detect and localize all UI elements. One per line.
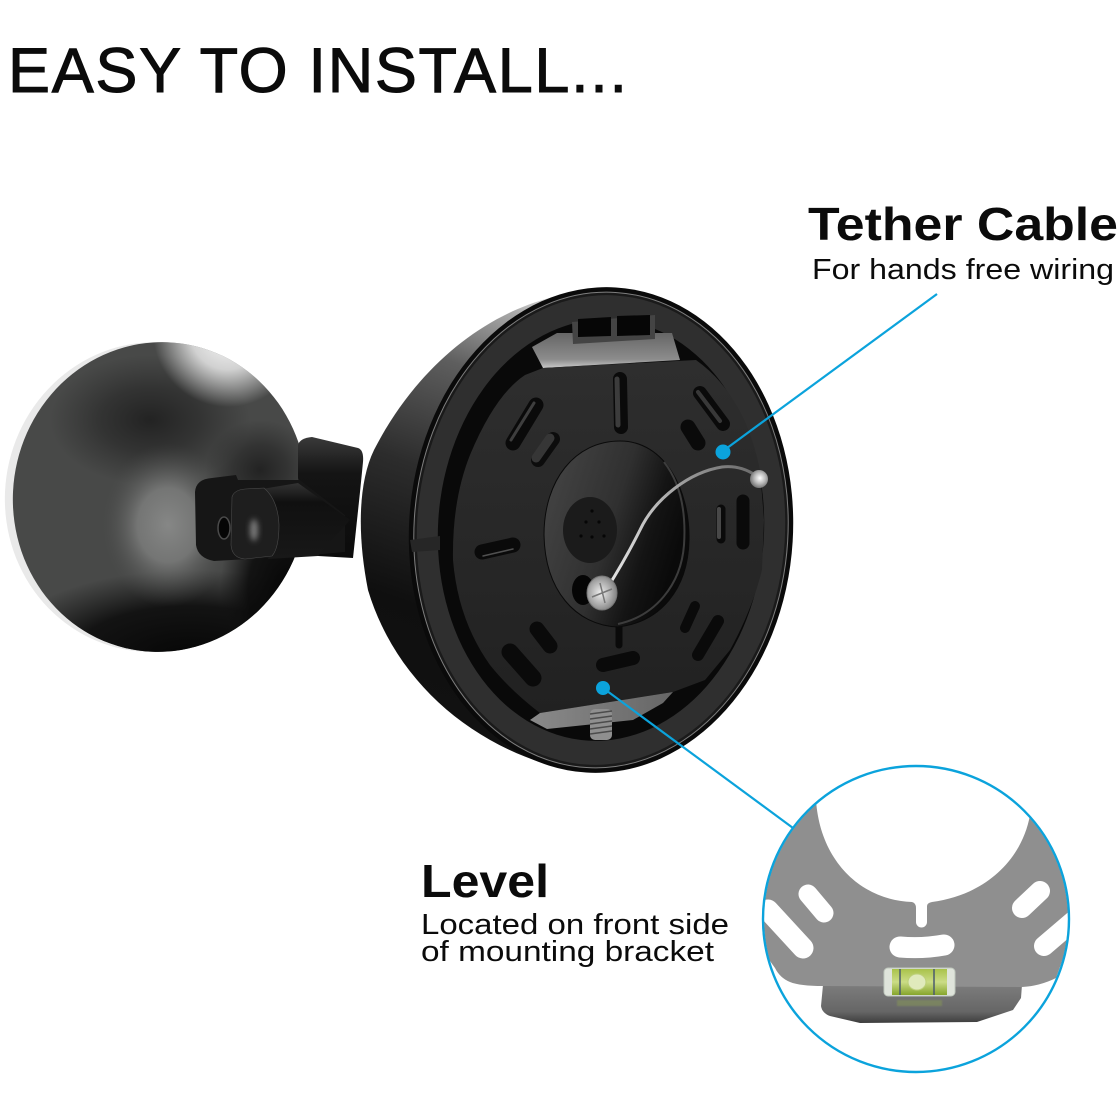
inset plate slots (768, 891, 1078, 948)
illustration: mount body (361, 291, 640, 768)
illustration: mounting disc face (395, 276, 807, 784)
leader line: level (596, 681, 793, 828)
vent holes (578, 315, 650, 337)
arm cylinder (262, 483, 350, 559)
threaded screw (590, 709, 612, 740)
inset bracket plate (755, 800, 1080, 987)
knuckle highlight (250, 519, 258, 541)
knuckle (231, 488, 279, 559)
leader line: tether cable (716, 294, 937, 460)
screw post (572, 575, 594, 605)
inset lower flange (821, 985, 1022, 1023)
level reflection (897, 1000, 942, 1006)
label: tether cable (808, 198, 1118, 286)
illustration: articulating arm (195, 437, 363, 561)
tether wire (606, 467, 755, 590)
white back plate edge (0, 323, 321, 671)
back bracket (195, 475, 345, 561)
label: tether cable: Tether Cable (808, 198, 1118, 250)
bolt hole (218, 517, 230, 539)
rim highlight (400, 281, 802, 779)
central recess (544, 441, 689, 627)
inner cavity (425, 309, 777, 751)
bracket plate (453, 360, 764, 713)
label: level: Located on front side (421, 909, 729, 941)
label: tether cable: For hands free wiring (812, 254, 1114, 286)
rim notch left (410, 536, 440, 552)
plate slots (482, 379, 743, 678)
label: level: Level (421, 855, 549, 907)
microphone grille (563, 497, 617, 563)
illustration: rear wall-mount sphere (5, 342, 299, 652)
label: level: of mounting bracket (421, 936, 714, 968)
inset circle outline (763, 766, 1069, 1072)
vent connector (572, 315, 655, 344)
recess ring highlight (618, 462, 684, 624)
outer rim (395, 276, 807, 784)
wire end ball (750, 470, 768, 488)
upper bracket tab (532, 333, 680, 368)
inset: level detail on bracket (755, 766, 1080, 1072)
rim face (403, 284, 799, 776)
lower bracket tab (530, 692, 673, 729)
label: level (421, 855, 729, 968)
tether screw head (587, 576, 617, 610)
sphere shading (12, 342, 299, 652)
upper arm block (298, 437, 363, 558)
bubble level (884, 968, 955, 996)
title: EASY TO INSTALL... (8, 36, 627, 106)
